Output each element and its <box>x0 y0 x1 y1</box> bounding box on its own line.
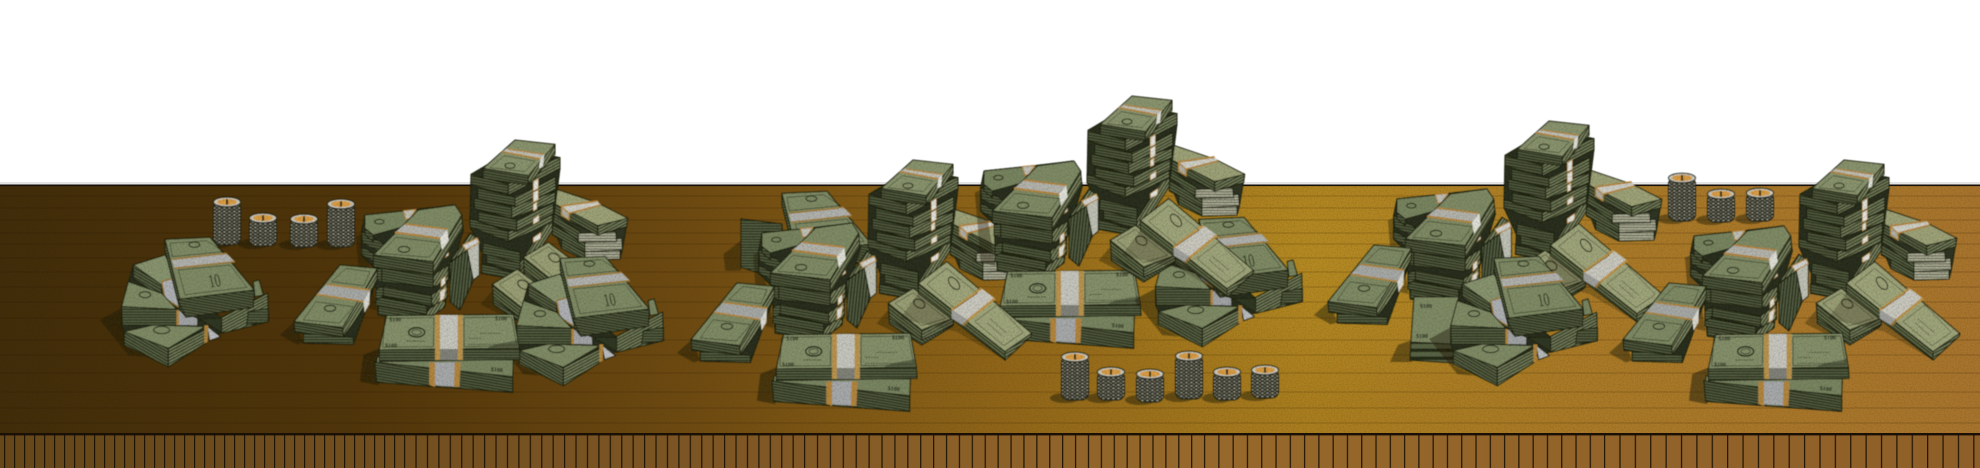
small tall stack <box>868 160 1026 300</box>
pile with 10 bundle <box>1429 256 1597 386</box>
frontal $100 bundles: $100 <box>385 343 397 350</box>
pile with 10 bundle, right of stack: 10 <box>602 290 618 311</box>
rear bundle and long diagonal bundle <box>877 262 1032 360</box>
center cash pile, right <box>975 161 1098 279</box>
frontal $100 bundles: $100 <box>490 366 503 374</box>
rear bundle <box>512 242 588 299</box>
pile with 10 bundle: 10 <box>1536 290 1552 311</box>
single diagonal bundle, right <box>1609 283 1706 362</box>
rear $100 bundle under pile: $100 <box>1416 333 1428 340</box>
frontal $100 bundles, rear: $100 <box>1010 273 1022 280</box>
pile with 10 bundle, right of stack <box>495 256 663 386</box>
frontal $100 bundles: $100 <box>1714 362 1726 369</box>
rear bundle and long diagonal bundle, far right <box>1805 262 1960 360</box>
frontal $100 bundles, rear: $100 <box>1006 299 1018 306</box>
money pile: middle group <box>677 96 1302 411</box>
rear $100 bundle under pile: $100 <box>1420 303 1432 310</box>
back stacked bundles <box>724 191 871 280</box>
center cash pile, left <box>753 223 876 341</box>
rear bundle and long diagonal bundle, right <box>1099 199 1254 297</box>
frontal $100 bundles: $100 <box>1824 334 1836 341</box>
frontal $100 bundles, rear: $100 <box>1111 322 1124 330</box>
tall cash stack <box>470 140 628 280</box>
tall cash stack, far right <box>1799 160 1957 300</box>
frontal $100 bundles <box>1689 333 1849 411</box>
frontal $100 bundles: $100 <box>1718 336 1730 343</box>
frontal $100 bundles: $100 <box>495 315 507 322</box>
coin stacks: right row <box>1657 173 1774 225</box>
pile with 10 bundle, far left: 10 <box>207 271 223 292</box>
table front edge with vertical grooves <box>0 433 1980 468</box>
single diagonal bundle <box>280 265 377 344</box>
center cash pile, right <box>1685 226 1808 344</box>
frontal $100 bundles: $100 <box>1819 385 1832 393</box>
center cash pile <box>356 205 479 323</box>
pile with 10 bundle <box>1134 217 1302 347</box>
frontal $100 bundles, front: $100 <box>887 385 900 393</box>
coin stacks: front row <box>1050 351 1278 405</box>
frontal $100 bundles, rear <box>981 270 1141 348</box>
money pile: left group <box>100 140 663 392</box>
frontal $100 bundles, front: $100 <box>786 336 798 343</box>
frontal $100 bundles, front <box>757 333 917 411</box>
tall cash stack <box>1504 121 1662 261</box>
tallest cash stack <box>1087 96 1245 236</box>
coin stacks: left row <box>202 197 354 250</box>
frontal $100 bundles <box>360 314 520 392</box>
single diagonal bundle, left <box>1314 245 1411 324</box>
wooden table top <box>0 182 1980 435</box>
frontal $100 bundles, front: $100 <box>892 334 904 341</box>
frontal $100 bundles: $100 <box>389 317 401 324</box>
money pile: right group <box>1314 121 1960 411</box>
rear bundle and long diagonal bundle <box>1509 224 1664 322</box>
pile with 10 bundle: 10 <box>1241 251 1257 272</box>
rear $100 bundle under pile <box>1390 297 1470 364</box>
single diagonal bundle <box>677 283 774 362</box>
frontal $100 bundles, rear: $100 <box>1116 271 1128 278</box>
frontal $100 bundles, front: $100 <box>782 362 794 369</box>
center cash pile, left <box>1388 189 1511 307</box>
rear bundle lower <box>481 269 557 326</box>
pile with 10 bundle, far left <box>100 237 268 367</box>
